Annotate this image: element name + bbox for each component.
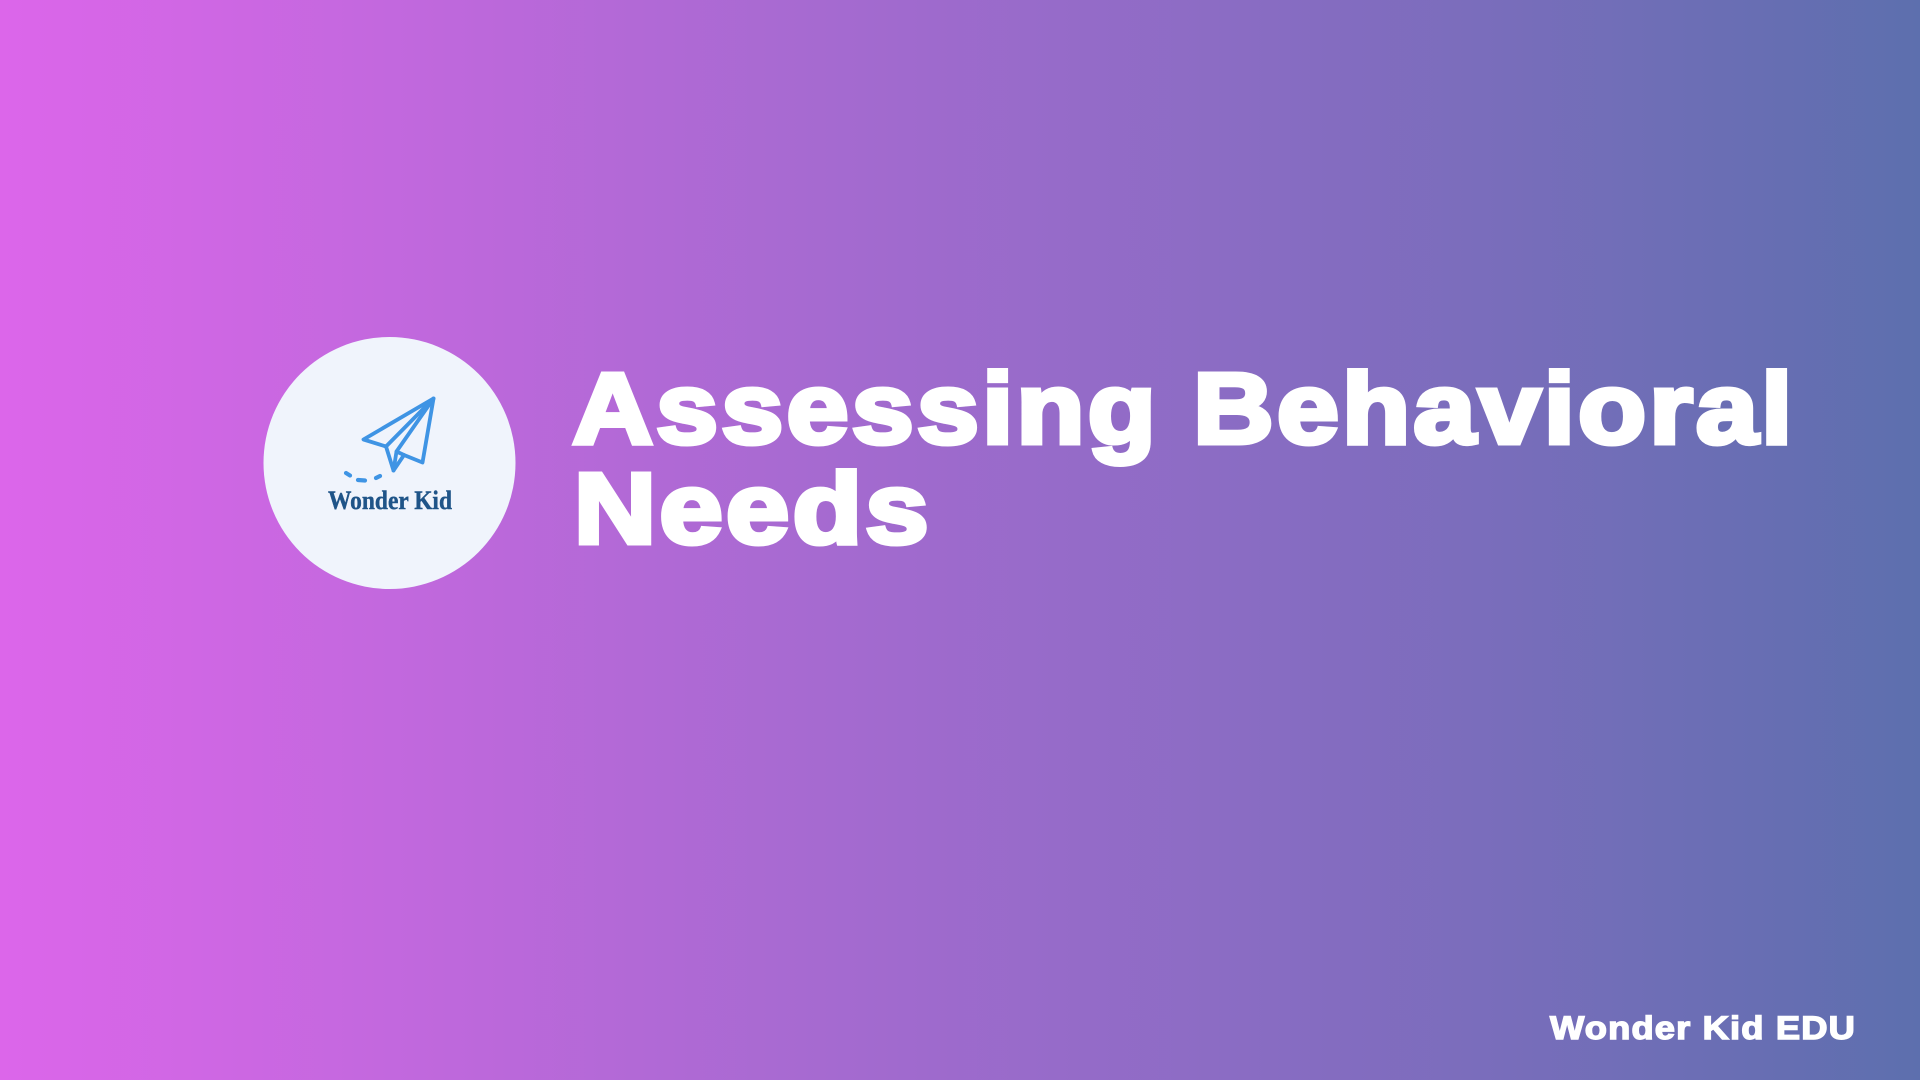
title line 1: Assessing Behavioral — [572, 353, 1796, 465]
logo circle — [264, 337, 516, 589]
title — [572, 353, 1796, 565]
logo wordmark: Wonder Kid — [328, 486, 452, 515]
logo badge — [264, 337, 516, 589]
icon: paper airplane — [346, 398, 434, 480]
footer brand label: Wonder Kid EDU — [1550, 1010, 1856, 1046]
title line 2: Needs — [574, 453, 932, 565]
